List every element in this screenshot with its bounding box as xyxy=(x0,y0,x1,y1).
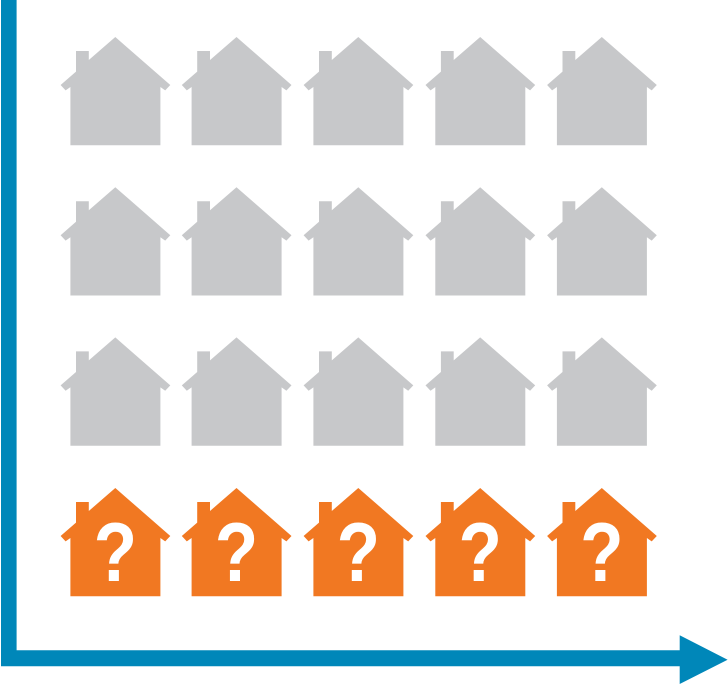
icon: gray house r2c2 xyxy=(182,187,292,296)
row 4: orange question-mark houses xyxy=(61,488,657,599)
icon: orange house with question mark c3: ? xyxy=(337,507,380,599)
icon: orange house with question mark c5: ? xyxy=(580,507,624,599)
icon: gray house r1c4 xyxy=(426,37,535,145)
icon: orange house with question mark c4: ? xyxy=(458,507,502,599)
icon: gray house r1c1 xyxy=(61,37,170,145)
icon: gray house r3c1 xyxy=(61,337,170,446)
icon: orange house with question mark c1 xyxy=(61,488,170,599)
icon: gray house r3c3 xyxy=(304,337,413,446)
icon: gray house r2c3 xyxy=(304,187,413,296)
icon: gray house r1c3 xyxy=(304,37,413,145)
icon: gray house r1c2 xyxy=(182,37,292,145)
icon: orange house with question mark c2 xyxy=(182,488,292,599)
icon: orange house with question mark c5 xyxy=(547,488,657,599)
icon: gray house r2c4 xyxy=(426,187,535,296)
icon: gray house r3c5 xyxy=(547,337,657,446)
row 2: gray houses xyxy=(61,187,657,296)
icon: orange house with question mark c3 xyxy=(304,488,413,599)
icon: orange house with question mark c4 xyxy=(426,488,535,599)
row 3: gray houses xyxy=(61,337,657,446)
icon: gray house r3c4 xyxy=(426,337,535,446)
icon: gray house r2c1 xyxy=(61,187,170,296)
icon: orange house with question mark c2: ? xyxy=(215,507,258,599)
row 1: gray houses xyxy=(61,37,657,145)
icon: orange house with question mark c1: ? xyxy=(94,507,137,599)
icon: gray house r1c5 xyxy=(547,37,657,145)
icon: gray house r2c5 xyxy=(547,187,657,296)
icon: gray house r3c2 xyxy=(182,337,292,446)
